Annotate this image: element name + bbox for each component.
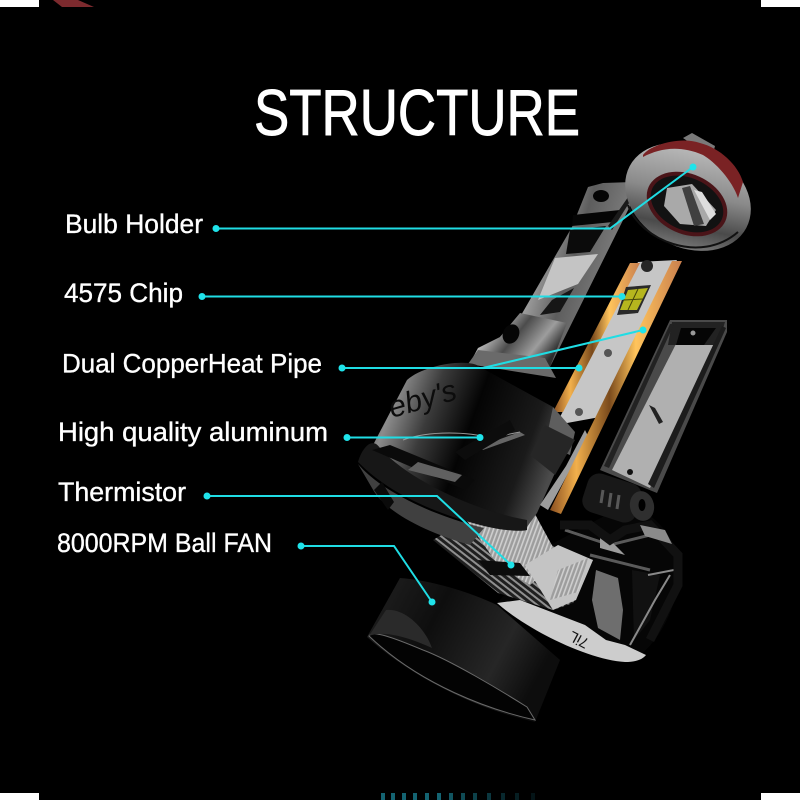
bottom teal stripes	[381, 793, 535, 800]
label: High quality aluminum with leader: High quality aluminum	[58, 417, 328, 447]
label: 4575 Chip with leader: 4575 Chip	[64, 278, 183, 308]
copper heat pipe	[550, 261, 682, 514]
LED chip board	[553, 260, 677, 425]
body lettering: eby's	[385, 374, 460, 425]
LED chip	[617, 285, 651, 315]
rear electronics unit with white base	[497, 505, 680, 662]
label: 8000RPM Ball FAN with leader: 8000RPM Ball FAN	[57, 528, 272, 558]
heat sink fins	[433, 500, 593, 610]
label: Bulb Holder with leader: Bulb Holder	[65, 209, 203, 239]
wire connector	[560, 470, 678, 640]
label: Bulb Holder with leader	[65, 164, 696, 239]
label: Thermistor with leader	[58, 477, 514, 568]
label: High quality aluminum with leader	[58, 417, 484, 447]
label: Dual CopperHeat Pipe with leaders: Dual CopperHeat Pipe	[62, 348, 322, 378]
label: Thermistor with leader: Thermistor	[58, 477, 186, 507]
title: STRUCTURE	[254, 76, 580, 149]
base lettering: 7iL	[566, 627, 592, 651]
lamp mounting ring	[606, 122, 770, 272]
arm holding the ring	[500, 182, 638, 367]
label: 8000RPM Ball FAN with leader	[57, 528, 436, 606]
main aluminium body	[358, 363, 590, 545]
label: 4575 Chip with leader	[64, 278, 626, 308]
illustration: exploded LED bulb	[358, 122, 770, 722]
right side frame	[600, 320, 727, 493]
neck cylinder	[468, 313, 567, 378]
fan shroud ring	[367, 578, 560, 722]
label: Dual CopperHeat Pipe with leaders	[62, 326, 646, 378]
